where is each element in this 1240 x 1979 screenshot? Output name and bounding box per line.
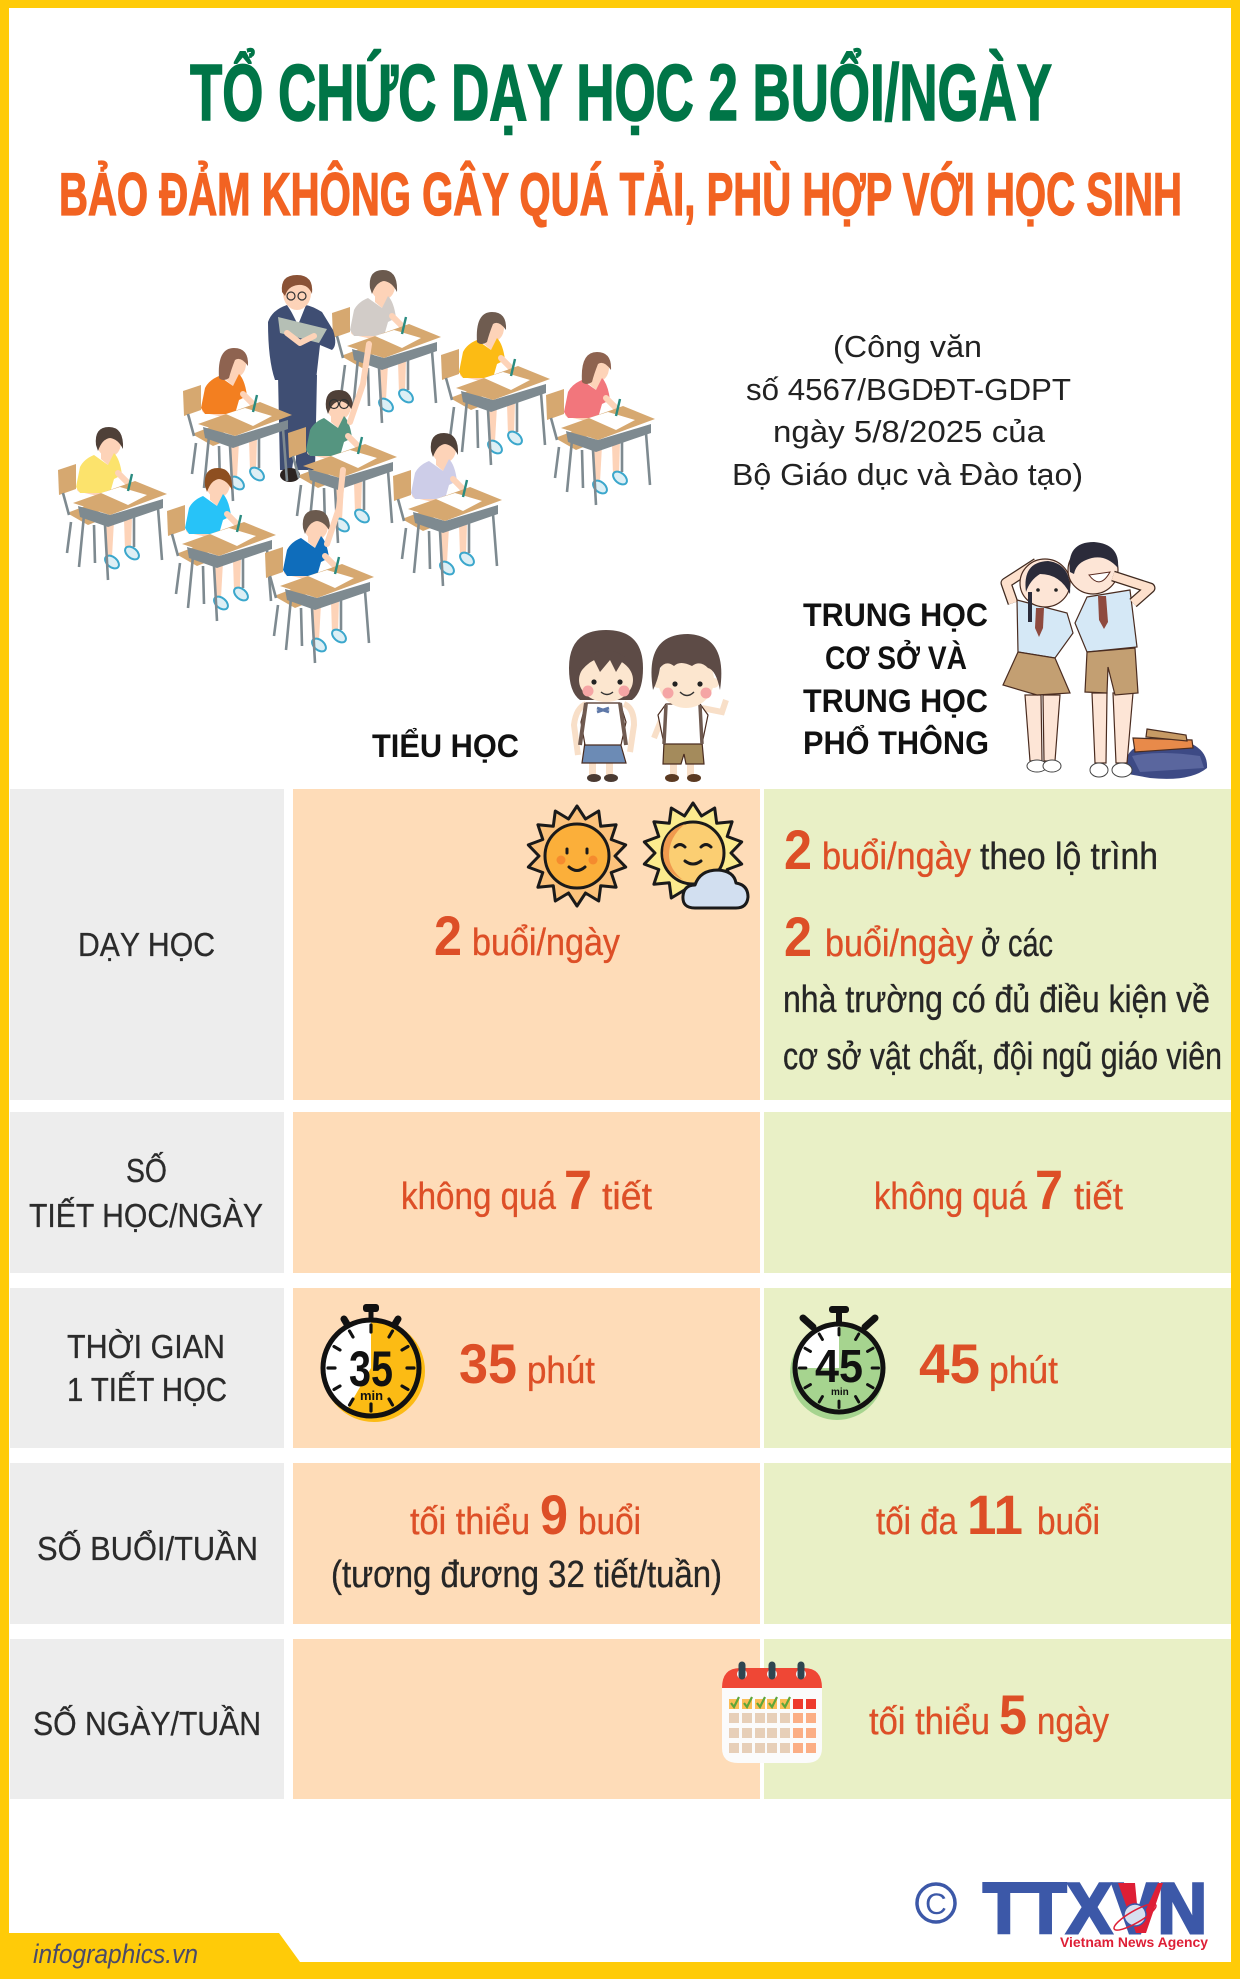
icon: stopwatch 35 minutes: 35 [349, 1341, 393, 1397]
logo: TTXVN: TTXVN [983, 1870, 1207, 1949]
row 5: days per week [10, 1639, 1231, 1799]
primary cell: tiết [602, 1176, 652, 1218]
row label: THỜI GIAN [67, 1328, 225, 1365]
illustration: classroom with teacher and students [58, 270, 655, 663]
primary cell: 2 [434, 904, 462, 967]
secondary cell: 7 [1035, 1158, 1063, 1221]
primary cell [293, 1463, 760, 1624]
copyright mark: C [925, 1888, 947, 1921]
icon: sun behind cloud [644, 803, 748, 908]
primary cell [293, 1639, 760, 1799]
icon: smiling sun [528, 806, 626, 906]
secondary cell: 2 [784, 818, 812, 881]
illustration: secondary students with school bag [1003, 542, 1207, 779]
primary cell [293, 1288, 760, 1448]
primary cell: 9 [540, 1483, 568, 1546]
logo: TTXVN: Vietnam News Agency [1060, 1934, 1208, 1950]
secondary cell [764, 1288, 1231, 1448]
secondary cell: buổi/ngày [825, 923, 973, 965]
heading: primary: TIỂU HỌC [372, 728, 519, 764]
secondary cell: 2 [784, 905, 812, 968]
document reference [732, 329, 1083, 492]
row 1: teaching sessions [10, 789, 1231, 1100]
primary cell: (tương đương 32 tiết/tuần) [331, 1554, 722, 1596]
row label: TIẾT HỌC/NGÀY [29, 1197, 263, 1234]
copyright mark [917, 1884, 955, 1922]
secondary cell: phút [989, 1350, 1058, 1392]
secondary cell: theo lộ trình [980, 836, 1158, 878]
secondary cell: 11 [967, 1483, 1023, 1546]
icon: stopwatch 35 minutes: min [360, 1388, 383, 1403]
row 4: sessions per week [10, 1463, 1231, 1624]
secondary cell: không quá [874, 1176, 1028, 1218]
source website: infographics.vn [33, 1939, 198, 1969]
secondary cell: ở các [981, 923, 1053, 965]
icon: stopwatch 45 minutes: 45 [815, 1340, 863, 1392]
primary cell: 35 [459, 1332, 517, 1395]
secondary cell [764, 1112, 1231, 1273]
document reference: (Công văn [833, 329, 982, 364]
row label [10, 1463, 284, 1624]
document reference: số 4567/BGDĐT-GDPT [746, 372, 1071, 407]
primary cell: tối thiểu [410, 1501, 530, 1543]
row label: SỐ [126, 1151, 167, 1189]
secondary cell: tối đa [876, 1501, 958, 1543]
secondary cell [764, 1639, 1231, 1799]
row label: DẠY HỌC [78, 926, 215, 963]
primary cell: phút [527, 1350, 595, 1392]
illustration: primary school children [569, 630, 726, 782]
icon: stopwatch 45 minutes: min [831, 1387, 849, 1398]
secondary cell: buổi/ngày [822, 836, 971, 878]
secondary cell [764, 789, 1231, 1100]
row label: SỐ NGÀY/TUẦN [33, 1704, 261, 1742]
primary cell: không quá [401, 1176, 557, 1218]
heading: lower and upper secondary: TRUNG HỌC [803, 597, 988, 633]
row label [10, 1112, 284, 1273]
row 2: periods per day [10, 1112, 1231, 1273]
heading: lower and upper secondary: TRUNG HỌC [803, 683, 988, 719]
primary cell: 7 [564, 1158, 592, 1221]
icon: calendar [722, 1665, 822, 1763]
row label: SỐ BUỔI/TUẦN [37, 1529, 258, 1567]
secondary cell: tiết [1074, 1176, 1123, 1218]
primary cell [293, 789, 760, 1100]
row label [10, 1639, 284, 1799]
secondary cell: ngày [1037, 1701, 1109, 1743]
secondary cell [764, 1463, 1231, 1624]
heading: lower and upper secondary: PHỔ THÔNG [803, 725, 989, 761]
icon: stopwatch 45 minutes [790, 1306, 884, 1420]
secondary cell: 45 [919, 1332, 980, 1395]
secondary cell: buổi [1037, 1501, 1100, 1543]
row label: 1 TIẾT HỌC [67, 1371, 227, 1408]
row label [10, 1288, 284, 1448]
icon: stopwatch 35 minutes [323, 1304, 425, 1422]
secondary cell: tối thiểu [869, 1701, 990, 1743]
secondary cell: 5 [999, 1683, 1027, 1746]
heading: lower and upper secondary: CƠ SỞ VÀ [825, 640, 967, 676]
primary cell [293, 1112, 760, 1273]
footer tab [0, 1933, 1240, 1979]
document reference: Bộ Giáo dục và Đào tạo) [732, 457, 1083, 492]
row 3: period length [10, 1288, 1231, 1448]
document reference: ngày 5/8/2025 của [773, 414, 1046, 449]
primary cell: buổi [578, 1501, 641, 1543]
heading: lower and upper secondary [803, 597, 989, 761]
primary cell: buổi/ngày [472, 922, 620, 964]
row label [10, 789, 284, 1100]
